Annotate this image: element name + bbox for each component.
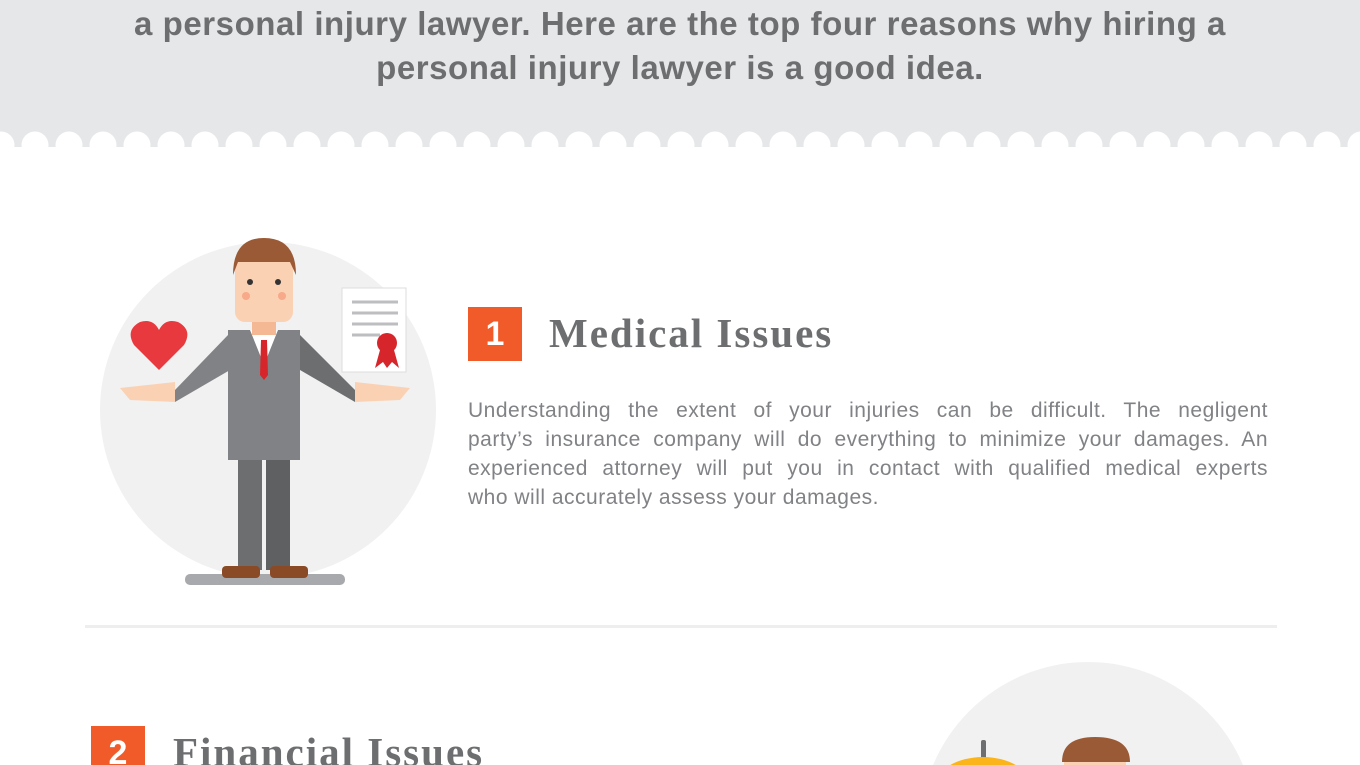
number badge 1 [468,307,522,361]
section 1 text: party’s insurance company will do everything to minimize your damages. An [468,428,1268,451]
section 1 heading [468,307,833,361]
number badge 1: 1 [486,315,504,353]
illustration: lawyer with heart and certificate [100,238,436,585]
scalloped edge [0,132,1360,147]
header band [0,0,1360,147]
section 2 heading [91,726,484,765]
illustration: coins and person [933,662,1242,765]
intro text: a personal injury lawyer. Here are the top four reasons why hiring a [134,5,1226,42]
section 1 text: Understanding the extent of your injuries can be difficult. The negligent [468,399,1268,422]
number badge 2 [91,726,145,765]
section 1 text: experienced attorney will put you in contact with qualified medical experts [468,457,1268,480]
section 1 text: who will accurately assess your damages. [468,486,879,509]
section 1 text [468,399,1268,509]
title 1: Medical Issues [549,310,833,356]
intro text [134,5,1226,86]
intro text: personal injury lawyer is a good idea. [376,49,984,86]
